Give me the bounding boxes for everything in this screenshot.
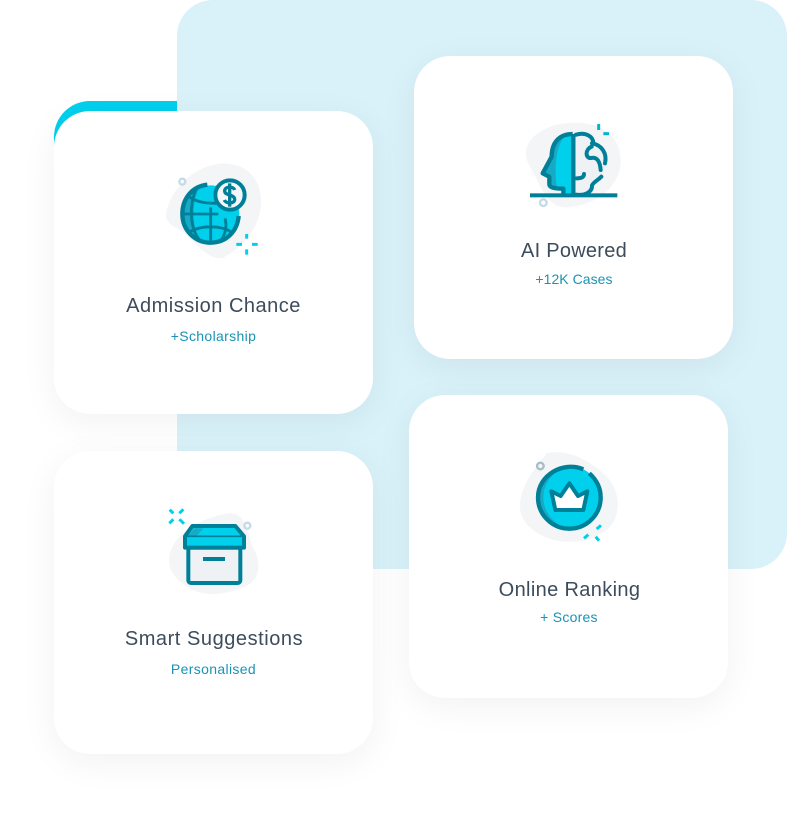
subheading: + Scores [540,609,598,625]
icon: crown badge [520,452,618,542]
heading: AI Powered [521,240,627,262]
subheading: +12K Cases [535,271,613,287]
heading: Online Ranking [499,579,640,601]
panel: admission chance [54,111,373,414]
heading: Smart Suggestions [125,628,303,650]
panel: online ranking [409,395,728,698]
icon: box [168,508,258,594]
background panel [177,0,787,569]
subheading: +Scholarship [171,328,256,344]
icon: head and brain [526,122,620,208]
cyan accent behind first card [54,101,177,161]
panel: smart suggestions [54,451,373,754]
heading: Admission Chance [126,295,301,317]
icon: globe with dollar coin [166,164,261,258]
subheading: Personalised [171,661,256,677]
panel: ai powered [414,56,733,359]
